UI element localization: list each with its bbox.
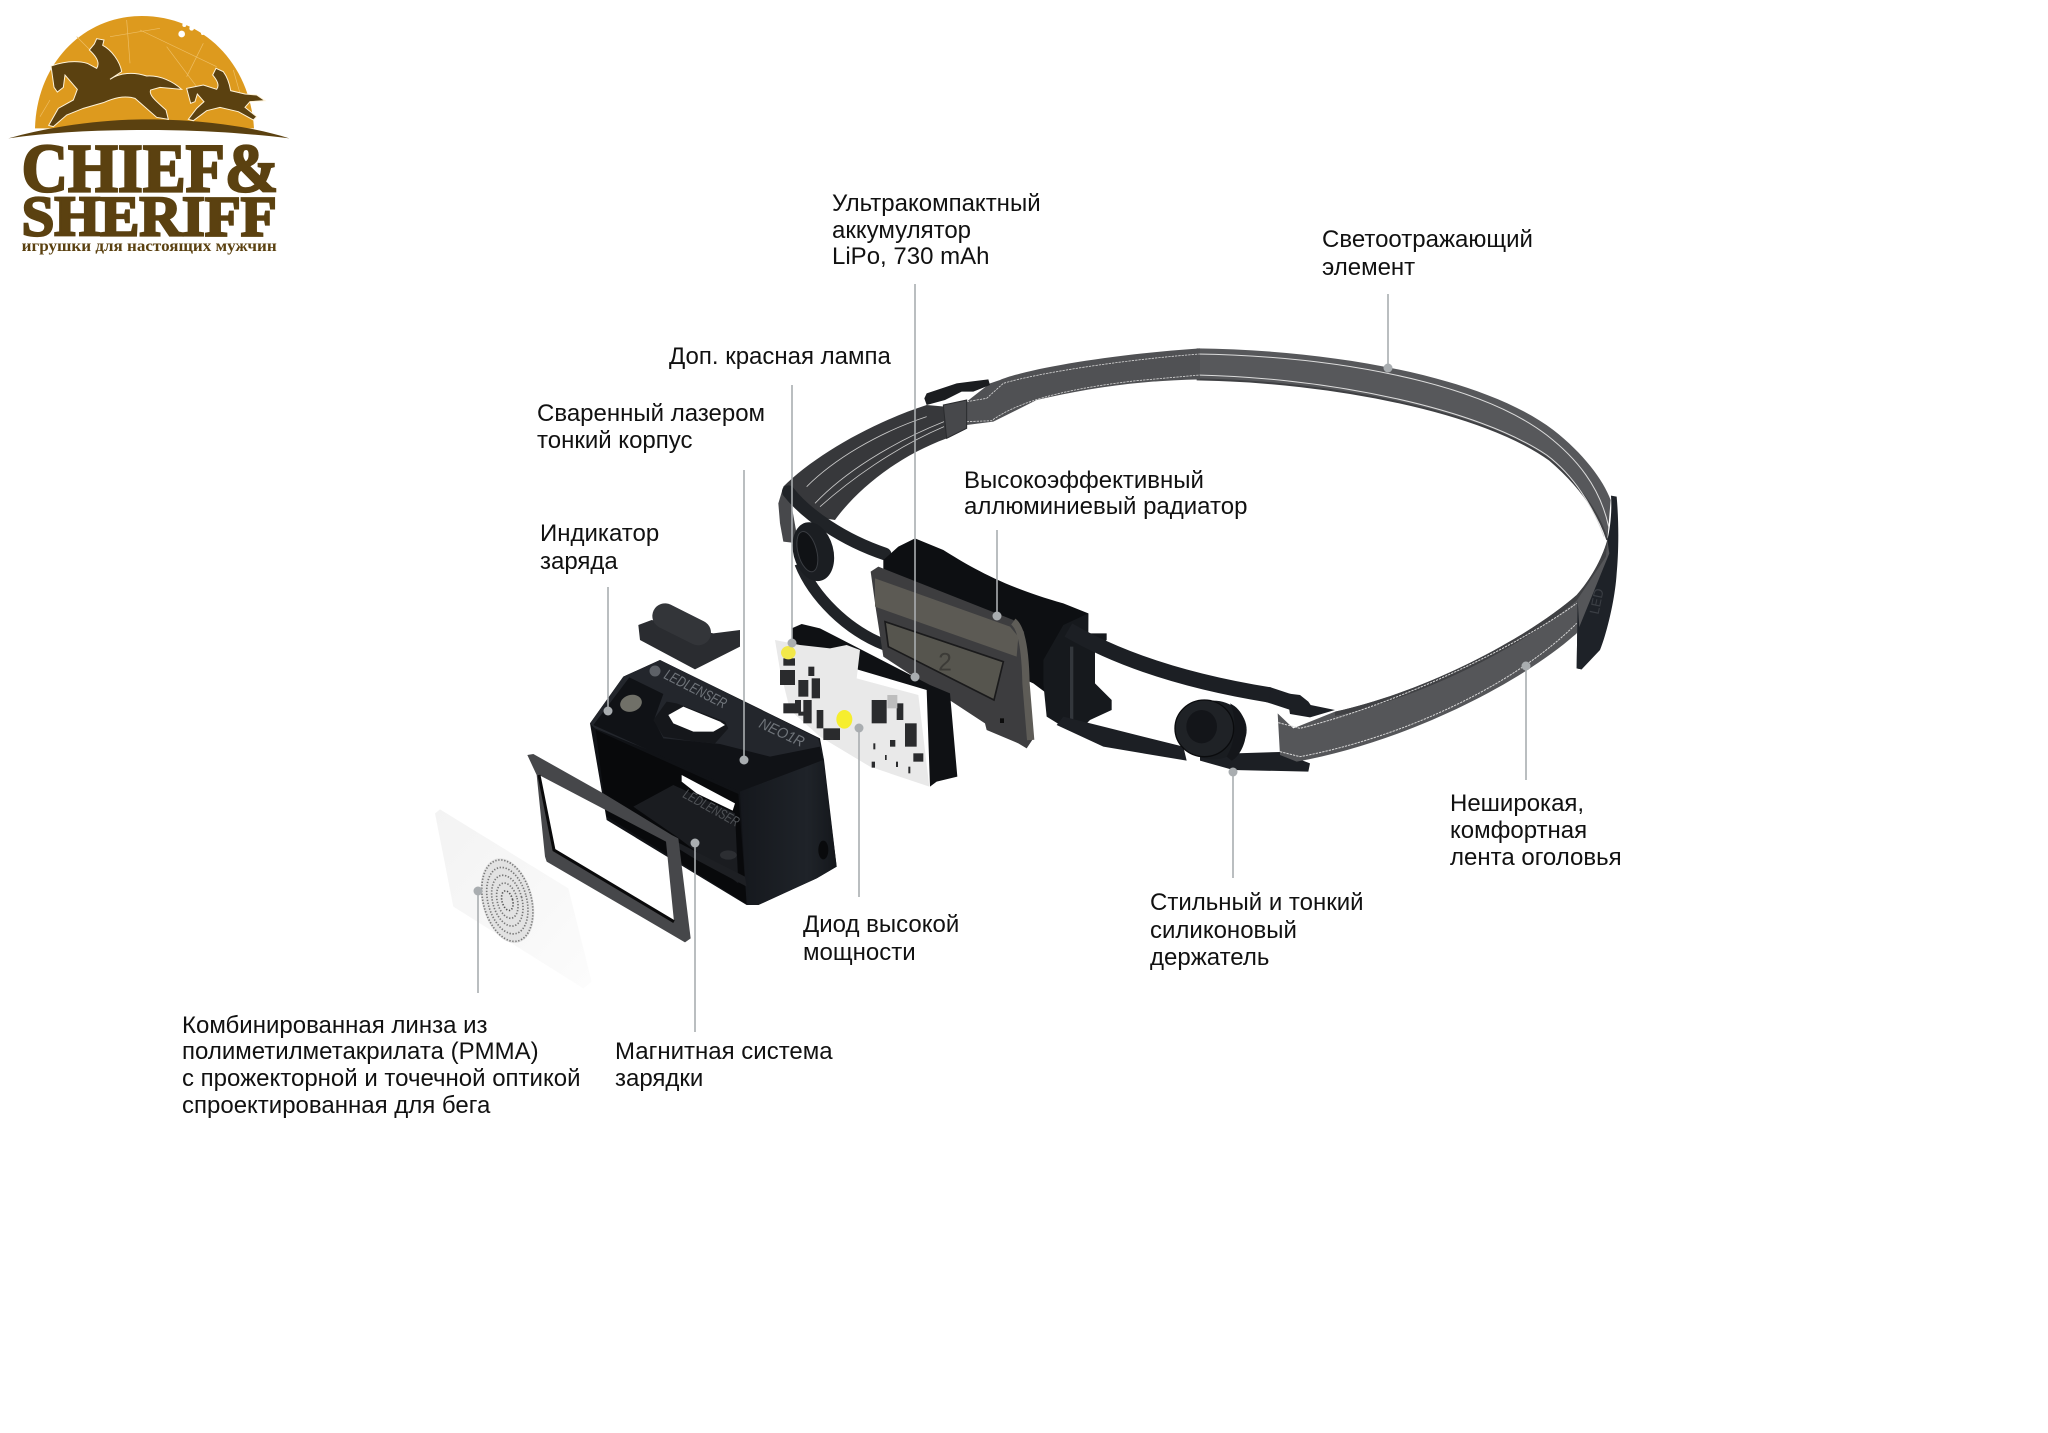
battery label: Ультракомпактный	[832, 190, 1041, 217]
silicone button	[638, 616, 740, 669]
left holder	[786, 492, 885, 645]
logo sun	[35, 16, 254, 128]
lower arm	[800, 563, 885, 645]
logo large horse and rider	[49, 39, 182, 127]
callout: magnetic charging	[615, 838, 833, 1092]
button pill	[665, 616, 698, 633]
radiator label: аллюминиевый радиатор	[964, 493, 1247, 520]
strap keeper	[943, 400, 967, 438]
headband leader	[1522, 662, 1530, 780]
holder label: держатель	[1150, 944, 1269, 971]
right holder	[1043, 613, 1270, 761]
lens label: с прожекторной и точечной оптикой	[182, 1065, 580, 1092]
radiator rim	[1013, 622, 1031, 740]
logo wordmark line 1: CHIEF&	[22, 131, 278, 207]
reflective label: Светоотражающий	[1322, 226, 1533, 253]
callout: laser-welded body	[537, 400, 765, 764]
buckle	[924, 379, 990, 405]
housing top face	[590, 660, 824, 792]
logo small horse and rider	[187, 68, 265, 121]
diode leader	[854, 724, 864, 897]
holder rail	[1067, 647, 1077, 720]
red lamp label: Доп. красная лампа	[669, 343, 892, 370]
red-lamp LED	[781, 646, 796, 659]
housing engraving: inner LEDLENSER: LEDLENSER	[681, 786, 743, 830]
headband label: Неширокая,	[1450, 790, 1584, 817]
body leader	[740, 470, 748, 764]
board components	[780, 658, 923, 773]
engraving dot	[650, 666, 660, 676]
rear strap	[1197, 348, 1611, 540]
rear strap stitching	[1197, 354, 1609, 537]
battery cradle	[883, 538, 1088, 723]
top strap stitching	[967, 354, 1200, 422]
logo wordmark line 2: SHERIFF	[22, 185, 277, 248]
holder ring crescent	[1227, 703, 1246, 761]
callout: radiator	[964, 467, 1247, 620]
raised pill	[653, 702, 728, 743]
holder ring back	[1180, 701, 1247, 759]
logo tagline: игрушки для настоящих мужчин	[22, 238, 277, 255]
magnetic label: зарядки	[615, 1065, 703, 1092]
holder label: силиконовый	[1150, 917, 1297, 944]
headband right section	[1197, 348, 1618, 772]
lens label: Комбинированная линза из	[182, 1012, 488, 1039]
logo horizon	[8, 119, 289, 138]
tag logo mark: LED	[1587, 587, 1607, 616]
lens base	[472, 852, 543, 949]
reflective label: элемент	[1322, 254, 1415, 281]
holder end lower	[1200, 747, 1310, 772]
lens plate	[435, 809, 592, 988]
headband left section	[775, 348, 1270, 787]
callout: reflective element	[1322, 226, 1533, 372]
aluminium radiator	[871, 567, 1033, 748]
headband label: лента оголовья	[1450, 844, 1622, 871]
housing engraving: NEO1R: NEO1R	[756, 715, 807, 751]
front strap	[1278, 540, 1609, 762]
radiator number: 2	[938, 650, 952, 677]
lamp housing	[590, 660, 837, 905]
holder label: Стильный и тонкий	[1150, 889, 1364, 916]
indicator label: заряда	[540, 548, 618, 575]
callout: battery	[832, 190, 1041, 682]
right tag	[1577, 496, 1618, 669]
housing engraving: LEDLENSER	[650, 666, 730, 712]
lens facets	[473, 854, 541, 947]
radiator square mark	[1000, 718, 1004, 723]
battery leader	[910, 284, 920, 682]
holder end top	[1287, 693, 1335, 717]
ring button	[793, 529, 822, 574]
board substrate	[775, 640, 929, 787]
indicator label: Индикатор	[540, 520, 659, 547]
lens label: полиметилметакрилата (PMMA)	[182, 1038, 539, 1065]
rear strap lower edge	[1197, 379, 1607, 540]
top strap	[967, 348, 1200, 425]
red lamp leader	[788, 385, 796, 648]
circuit board	[775, 640, 929, 787]
radiator plate	[871, 567, 1033, 748]
holder arm	[1268, 695, 1297, 704]
radiator upper panel	[875, 578, 1018, 657]
ring	[786, 518, 840, 586]
logo: Chief & Sheriff	[8, 16, 289, 255]
headband label: комфортная	[1450, 817, 1587, 844]
housing dark front of top	[593, 677, 823, 792]
housing opening	[596, 730, 747, 904]
magnetic leader	[690, 838, 700, 1032]
holder column	[1043, 613, 1112, 730]
diode label: мощности	[803, 939, 916, 966]
radiator leader	[992, 530, 1002, 620]
left strap tail	[778, 487, 798, 543]
housing lower rail	[670, 838, 747, 887]
front strap top edge	[1335, 540, 1607, 716]
body label: Сваренный лазером	[537, 400, 765, 427]
right tag lower	[1577, 600, 1582, 669]
magnetic label: Магнитная система	[615, 1038, 833, 1065]
housing silhouette	[590, 660, 837, 905]
indicator leader	[604, 587, 612, 716]
battery	[792, 624, 957, 787]
callout: red lamp	[669, 343, 892, 648]
front strap stitching	[1278, 603, 1577, 757]
radiator label: Высокоэффективный	[964, 467, 1204, 494]
lens optic	[472, 852, 543, 949]
lens label: спроектированная для бега	[182, 1092, 491, 1119]
housing floor hole	[720, 850, 737, 860]
holder button	[1186, 710, 1217, 743]
upper arm	[788, 492, 885, 554]
battery label: аккумулятор	[832, 217, 971, 244]
body label: тонкий корпус	[537, 427, 692, 454]
lamp unit	[435, 616, 837, 988]
high-power LED	[836, 710, 852, 729]
housing interior floor	[633, 785, 738, 883]
callout: headband	[1450, 662, 1622, 871]
magnetic frame inner edge	[539, 775, 674, 922]
lens leader	[474, 886, 482, 993]
diode label: Диод высокой	[803, 911, 959, 938]
magnetic frame	[527, 754, 691, 942]
callout: silicone holder	[1150, 768, 1364, 971]
callout: high-power diode	[803, 724, 959, 966]
combined lens	[435, 809, 592, 988]
charge indicator window	[618, 692, 644, 714]
housing side hole	[818, 841, 828, 859]
left strap stitching	[807, 417, 944, 507]
callout: lens	[182, 886, 580, 1119]
left strap	[783, 405, 947, 520]
holder upper arm	[1068, 630, 1270, 695]
housing slot	[682, 775, 735, 811]
holder leader	[1228, 768, 1238, 878]
pill opening	[668, 707, 725, 732]
engraving text: LEDLENSER	[661, 666, 730, 712]
button base	[638, 620, 740, 669]
battery label: LiPo, 730 mAh	[832, 243, 989, 270]
radiator window	[885, 622, 1003, 700]
housing front face	[740, 760, 837, 905]
logo sun scratches	[40, 20, 240, 117]
holder lower arm	[1057, 717, 1187, 761]
callout: charge indicator	[540, 520, 659, 716]
reflective leader	[1384, 294, 1392, 372]
holder ring	[1175, 700, 1234, 757]
